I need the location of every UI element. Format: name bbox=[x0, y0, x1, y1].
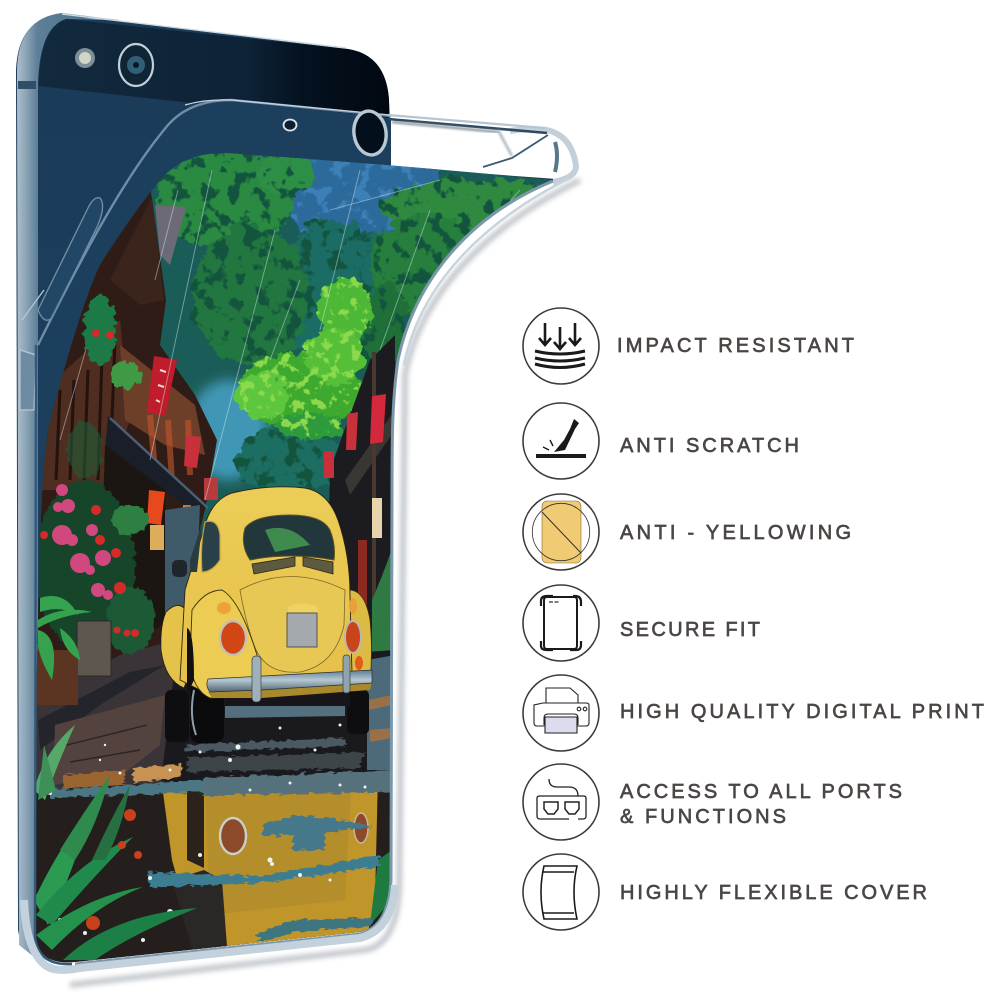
engine lid bbox=[240, 576, 345, 672]
far left fender bbox=[160, 605, 186, 688]
upper glass band bbox=[38, 19, 390, 125]
feature: anti scratch bbox=[523, 403, 799, 479]
right hanging lanterns bbox=[324, 394, 386, 538]
case drop shadow bbox=[70, 180, 580, 985]
feature: high quality digital print bbox=[523, 675, 984, 751]
side mirror bbox=[172, 560, 187, 577]
front-facing rear fender bbox=[190, 590, 257, 698]
phone and clear case bbox=[16, 13, 580, 985]
printed artwork: rainy street and yellow car bbox=[28, 145, 560, 975]
wheels bbox=[165, 686, 369, 743]
icon: ports and cable bbox=[523, 764, 599, 840]
label: SECURE FIT bbox=[620, 619, 760, 641]
dark awning bbox=[105, 416, 206, 512]
label bbox=[620, 781, 902, 828]
phone metal frame bbox=[17, 13, 120, 960]
puddle planks bbox=[63, 738, 365, 795]
background trees bbox=[155, 150, 560, 494]
red lanterns left bbox=[147, 356, 218, 525]
phone back body bbox=[16, 13, 391, 960]
right corner foliage bbox=[370, 852, 390, 922]
label: & FUNCTIONS bbox=[620, 806, 786, 828]
bright foreground tree bbox=[235, 278, 372, 439]
red awning strip bbox=[94, 185, 150, 270]
rain streaks bbox=[60, 170, 520, 500]
feature: access to ports bbox=[523, 764, 902, 840]
distant blue haze bbox=[188, 380, 268, 480]
yellow beetle car bbox=[161, 487, 372, 743]
camera flash bbox=[75, 48, 95, 68]
right buildings bbox=[324, 335, 395, 670]
reflection of the car bbox=[34, 770, 395, 975]
foreground grass bbox=[34, 725, 197, 960]
icon: blade scratching surface bbox=[523, 403, 599, 479]
microphone hole bbox=[284, 120, 296, 130]
label: ANTI - YELLOWING bbox=[620, 522, 851, 544]
label: IMPACT RESISTANT bbox=[617, 335, 854, 357]
side window bbox=[201, 521, 220, 572]
tail lights bbox=[217, 598, 363, 670]
icon: impact arrows bbox=[523, 308, 599, 384]
feature: impact resistant bbox=[523, 308, 854, 384]
icon: flexed cover bbox=[523, 854, 599, 930]
reflected puddle bands bbox=[50, 770, 392, 942]
case top right frame bbox=[388, 115, 576, 182]
upper roof bbox=[110, 197, 164, 305]
left pavement bbox=[36, 644, 173, 789]
right fender bbox=[350, 590, 372, 671]
engine vents bbox=[252, 557, 333, 574]
icon: printer bbox=[523, 675, 599, 751]
feature: anti yellowing bbox=[523, 494, 851, 570]
shop interior bbox=[104, 445, 166, 630]
left timber buildings bbox=[28, 185, 217, 680]
feature list bbox=[523, 308, 984, 930]
rear window bbox=[243, 515, 334, 560]
label: ACCESS TO ALL PORTS bbox=[620, 781, 902, 803]
camera cut-out bbox=[351, 109, 389, 157]
label: HIGHLY FLEXIBLE COVER bbox=[620, 882, 927, 904]
foreground blurred flowers bbox=[86, 809, 142, 930]
side button cut-out bbox=[38, 198, 103, 320]
wheel arch bbox=[187, 628, 194, 695]
icon: crossed-out yellow case bbox=[523, 494, 599, 570]
hanging banner bbox=[155, 205, 186, 265]
feature: secure fit bbox=[523, 585, 760, 661]
main body shell bbox=[180, 487, 352, 690]
licence plate bbox=[287, 604, 318, 647]
water droplets bbox=[48, 724, 366, 948]
camera lens bbox=[119, 44, 153, 86]
clear case body bbox=[20, 100, 576, 700]
label: ANTI SCRATCH bbox=[620, 435, 799, 457]
forest base bbox=[30, 145, 560, 975]
label: HIGH QUALITY DIGITAL PRINT bbox=[620, 701, 984, 723]
feature: highly flexible cover bbox=[523, 854, 927, 930]
left side clip details bbox=[20, 290, 44, 410]
potted plant and flowers bbox=[35, 295, 154, 705]
chrome bumper bbox=[207, 655, 372, 702]
case outer edge bbox=[24, 178, 570, 970]
icon: phone with corner bumpers bbox=[523, 585, 599, 661]
mottled blue sky bbox=[276, 156, 441, 239]
wet road bbox=[160, 650, 395, 790]
